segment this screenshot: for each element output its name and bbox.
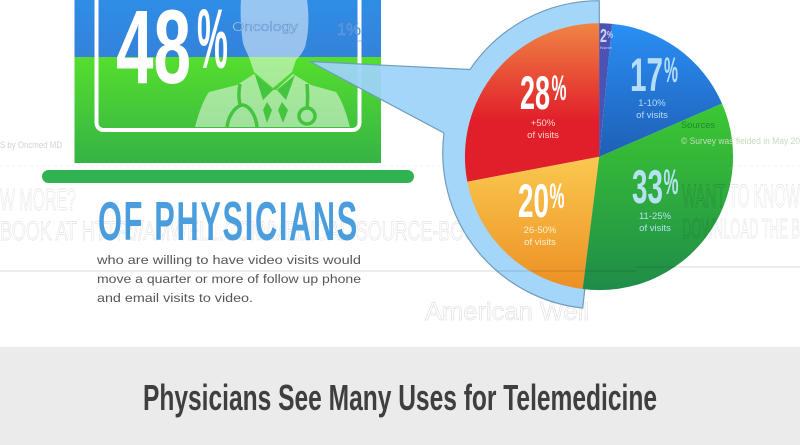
label: 2 percent: 2 xyxy=(600,26,607,46)
label: 17 percent: 17 xyxy=(630,48,663,101)
ghost table text on screen xyxy=(232,2,371,41)
ghost table text on screen: Oncology xyxy=(232,19,299,34)
ghost table text on screen: 1% xyxy=(337,20,361,39)
horizontal rules over chart xyxy=(0,267,800,271)
label: 17 percent: 1-10% xyxy=(638,98,666,109)
label: 28 percent: 28 xyxy=(520,66,550,119)
ghost sources text xyxy=(681,120,800,146)
heading: of physicians: OF PHYSICIANS xyxy=(98,190,359,252)
footer band xyxy=(0,347,800,445)
label: 2 percent: None xyxy=(600,46,612,50)
icon: doctor silhouette xyxy=(195,0,350,127)
icon: stethoscope xyxy=(227,84,315,127)
text block: description: and email visits to video. xyxy=(97,291,253,305)
label: 28 percent: of visits xyxy=(527,130,559,141)
label: 17 percent: of visits xyxy=(636,110,668,121)
ghost background text: W MORE? xyxy=(0,182,76,217)
label: 28 percent: +50% xyxy=(531,118,556,129)
laptop base bar xyxy=(42,170,414,183)
label: 17 percent xyxy=(630,48,678,121)
pie chart: % xyxy=(550,177,564,216)
label: 20 percent: 20 xyxy=(518,174,549,227)
label: 33 percent: 11-25% xyxy=(639,211,672,222)
label: 20 percent xyxy=(518,174,564,248)
label: 33 percent xyxy=(632,160,678,234)
label: 20 percent: of visits xyxy=(524,237,556,248)
ghost background text: S by Oncmed MD xyxy=(0,140,62,150)
ghost text over pie xyxy=(682,184,730,238)
text block: description xyxy=(96,253,361,305)
ghost sources text: Sources xyxy=(681,120,715,130)
label: 28 percent xyxy=(520,66,566,141)
pie chart xyxy=(464,23,734,290)
text block: description: who are willing to have video visits would xyxy=(96,253,361,267)
label: 2 percent: % xyxy=(607,30,613,41)
screen frame xyxy=(96,0,360,130)
label: 33 percent: of visits xyxy=(639,223,671,234)
pie chart: % xyxy=(552,69,566,108)
ghost background text: BOOK AT HTTP://AMWELL.COM/MEDICAL-SOURCE-BOOK xyxy=(0,216,490,246)
ghost background text xyxy=(0,140,800,326)
panel: laptop screen xyxy=(74,0,381,163)
callout: pointer and ring xyxy=(310,1,599,308)
label: 33 percent: 33 xyxy=(632,160,663,213)
label: 2 percent xyxy=(600,26,613,50)
pie chart: % xyxy=(664,51,678,90)
ghost background text: American Well xyxy=(425,298,589,326)
pie chart: % xyxy=(664,163,678,202)
label: 20 percent: 26-50% xyxy=(524,225,557,236)
text block: description: move a quarter or more of follow up phone xyxy=(97,272,361,286)
icon: tie and collar xyxy=(255,75,295,123)
